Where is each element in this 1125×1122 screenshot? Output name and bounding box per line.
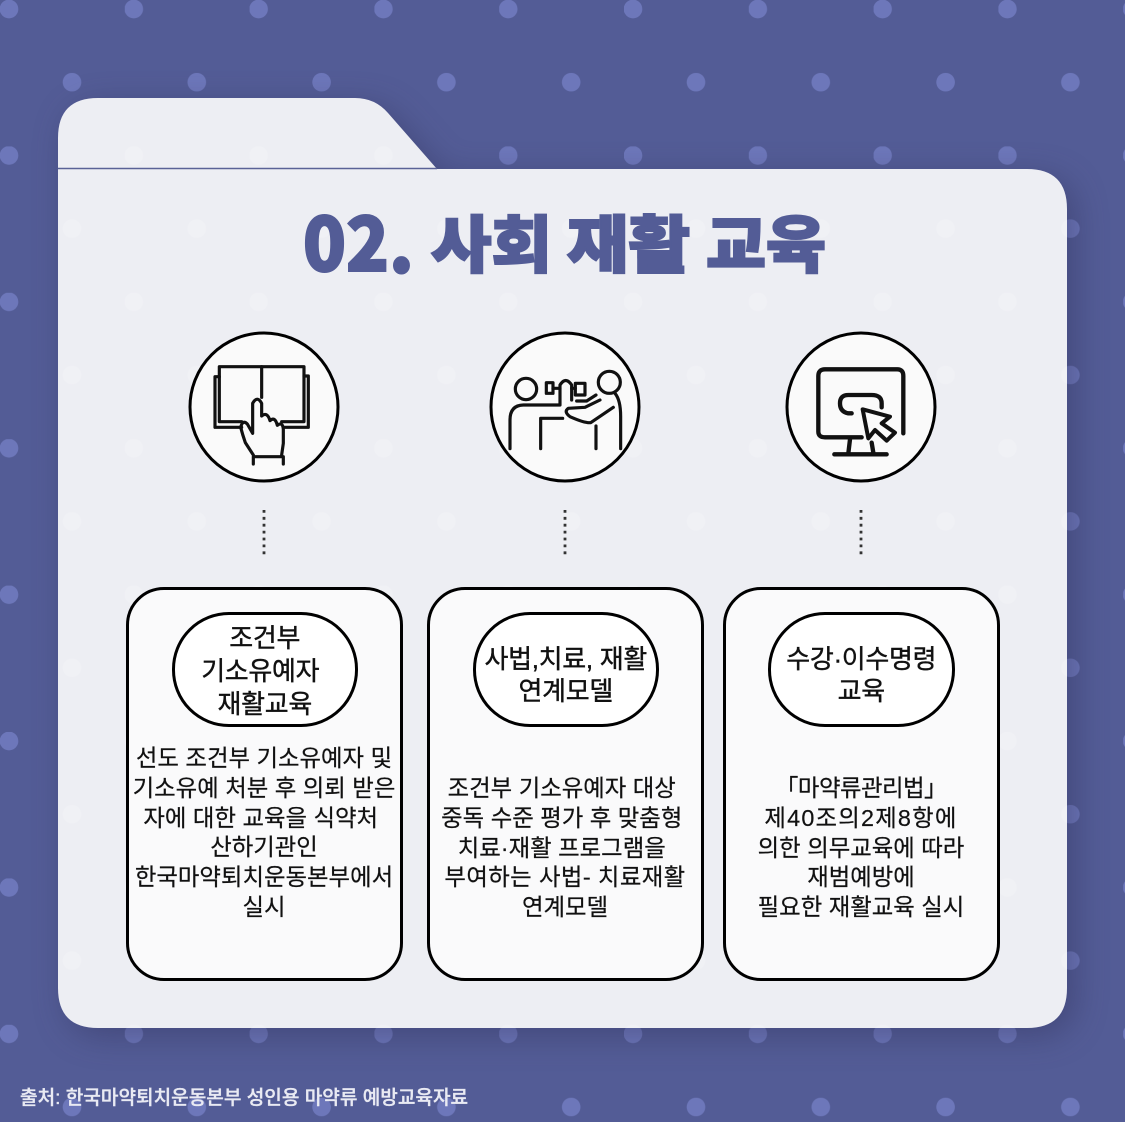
card 3 body text: 「마약류관리법」 — [775, 775, 947, 801]
card 2 body text: 치료·재활 프로그램을 — [458, 835, 666, 861]
card 2 body text: 조건부 기소유예자 대상 — [448, 775, 676, 801]
card 2 body text: 중독 수준 평가 후 맞춤형 — [441, 805, 682, 831]
card 3 body text: 재범예방에 — [807, 864, 915, 890]
card 1 heading pill: 재활교육 — [218, 689, 312, 719]
card 1 heading pill: 조건부 — [229, 623, 300, 653]
card 1 body text: 선도 조건부 기소유예자 및 — [136, 745, 392, 771]
card 1 body text: 한국마약퇴치운동본부에서 — [135, 864, 393, 890]
title: 사회 — [431, 195, 552, 285]
card 3 heading pill: 수강·이수명령 — [786, 644, 936, 674]
card 2 heading pill: 사법,치료, 재활 — [484, 644, 647, 674]
panel: card 3 — [722, 587, 1000, 981]
title: 교육 — [706, 195, 826, 285]
card 1 body text: 산하기관인 — [210, 834, 318, 860]
card 2 heading pill: 연계모델 — [518, 676, 613, 706]
card 3 body text: 의한 의무교육에 따라 — [758, 835, 964, 861]
card 3 body text: 필요한 재활교육 실시 — [758, 894, 964, 920]
card 3 body text — [758, 775, 964, 920]
panel: card 2 — [426, 587, 704, 981]
card 3 heading pill — [768, 612, 954, 727]
title: 02. — [303, 186, 414, 293]
card 1 body text: 기소유예 처분 후 의뢰 받은 — [133, 775, 395, 801]
card 2 body text: 부여하는 사법- 치료재활 — [444, 864, 686, 890]
title: 재활 — [567, 195, 690, 285]
card 1 heading pill — [172, 612, 358, 727]
card 1 body text — [133, 745, 395, 920]
panel: card 1 — [126, 587, 403, 981]
card 3 body text: 제40조의2제8항에 — [764, 805, 958, 831]
card 2 body text — [441, 775, 686, 920]
card 2 body text: 연계모델 — [522, 894, 608, 920]
card 2 heading pill — [472, 612, 659, 727]
card 1 heading pill: 기소유예자 — [201, 656, 319, 686]
source note: 출처: 한국마약퇴치운동본부 성인용 마약류 예방교육자료 — [20, 1088, 468, 1108]
card 3 heading pill: 교육 — [838, 676, 885, 706]
card 1 body text: 자에 대한 교육을 식약처 — [143, 805, 378, 831]
card 1 body text: 실시 — [242, 894, 286, 920]
